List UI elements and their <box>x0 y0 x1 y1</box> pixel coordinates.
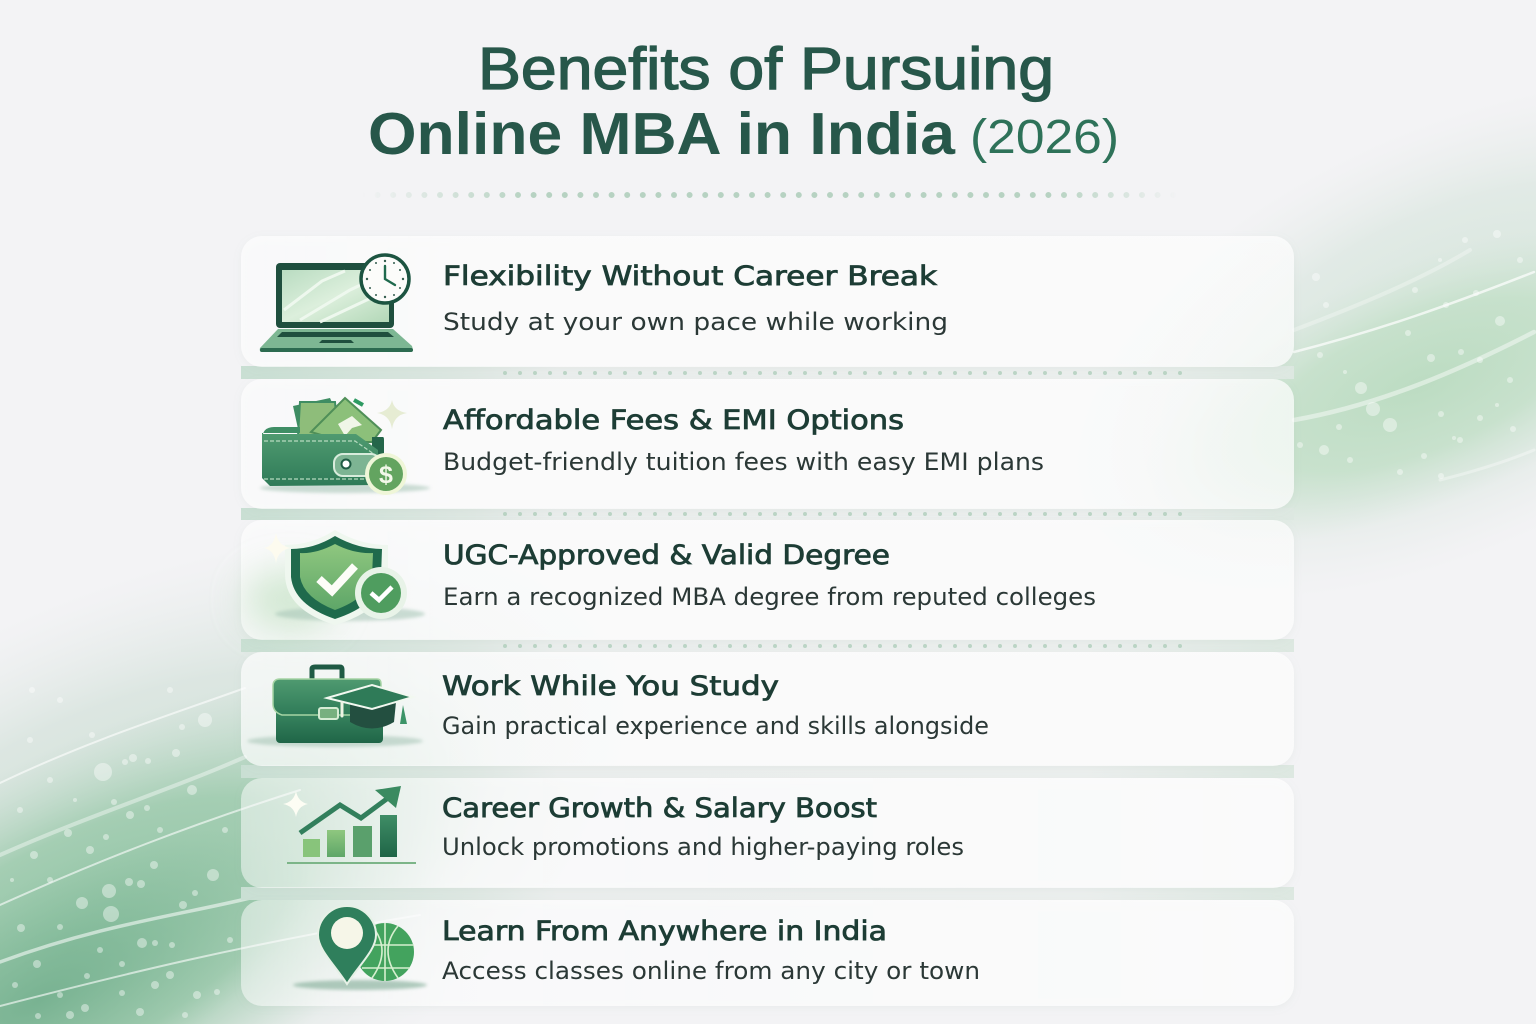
sparkle <box>264 533 291 563</box>
heading: UGC-Approved & Valid Degree <box>443 540 890 571</box>
description: Gain practical experience and skills alongside <box>442 712 989 740</box>
panel: work while study <box>241 652 1294 766</box>
description: Unlock promotions and higher-paying roles <box>442 833 964 861</box>
speckles <box>10 230 1523 1019</box>
panel: learn anywhere <box>241 900 1294 1006</box>
description: Earn a recognized MBA degree from reputed colleges <box>443 583 1096 611</box>
heading: Work While You Study <box>442 671 779 702</box>
icon: map pin and globe <box>293 906 427 990</box>
title <box>368 36 1119 167</box>
description: Access classes online from any city or town <box>442 957 980 985</box>
icon: growth chart <box>283 786 416 864</box>
white light streaks <box>0 250 1534 1006</box>
icon: wallet and coin: $ <box>379 461 393 489</box>
sparkle <box>283 791 308 817</box>
icon: briefcase with graduation cap <box>247 667 423 747</box>
panel: flexibility <box>241 236 1294 367</box>
description: Study at your own pace while working <box>443 308 948 336</box>
heading: Flexibility Without Career Break <box>443 261 937 292</box>
title dotted divider <box>362 192 1178 198</box>
heading: Career Growth & Salary Boost <box>442 793 877 824</box>
gaps between cards <box>241 366 1294 900</box>
heading: Affordable Fees & EMI Options <box>443 405 904 436</box>
title: Benefits of Pursuing <box>478 36 1054 102</box>
panel: career growth <box>241 778 1294 888</box>
icon: laptop with clock <box>260 255 413 352</box>
title: Online MBA in India <box>368 101 956 167</box>
panel: UGC degree <box>241 520 1294 640</box>
title: (2026) <box>970 111 1119 164</box>
icon: wallet and coin <box>260 398 430 495</box>
icon: shield with check <box>264 530 425 625</box>
sparkle <box>377 400 407 429</box>
description: Budget-friendly tuition fees with easy EMI plans <box>443 448 1044 476</box>
panel: fees <box>241 379 1294 509</box>
heading: Learn From Anywhere in India <box>442 916 887 947</box>
